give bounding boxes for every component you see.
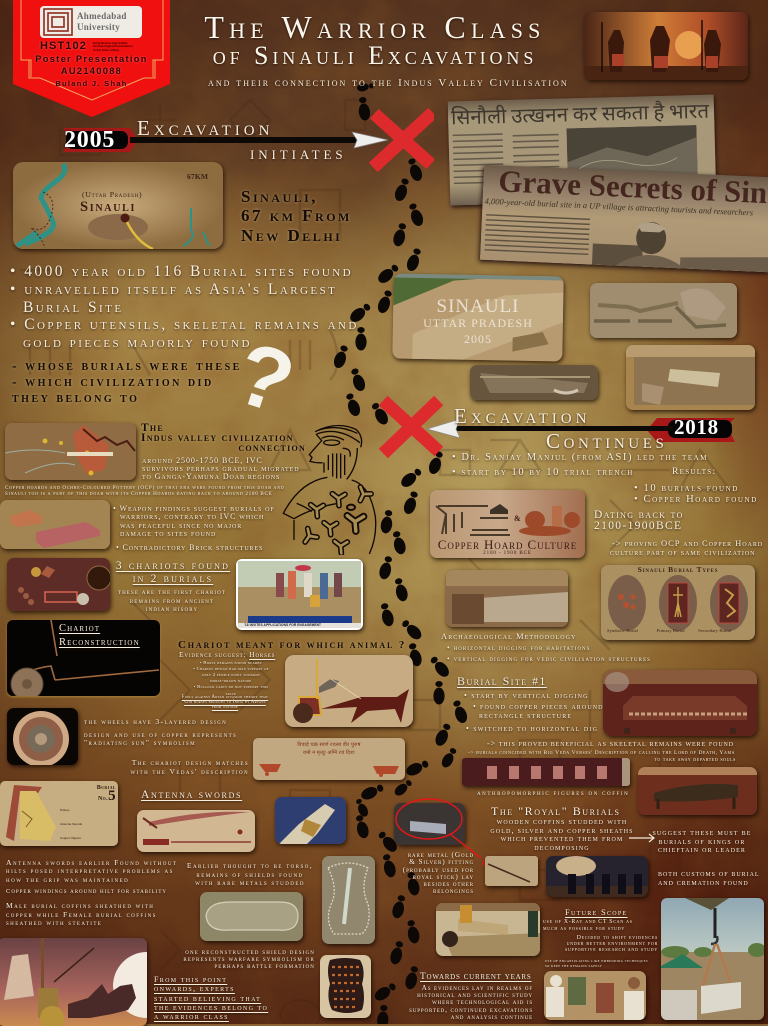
evidence list: • Horse remains found nearby xyxy=(200,660,262,665)
aryan theory note: from outside xyxy=(212,705,238,710)
questions: they belong to xyxy=(12,391,139,406)
methodology text: • horizontal digging for habitations xyxy=(447,642,591,652)
photo: shield remains xyxy=(200,892,303,941)
arrow: 2018 excavation continues xyxy=(426,418,735,442)
panel: burial no. 5 plan xyxy=(0,781,118,846)
photo: wooden bed coffin xyxy=(638,767,757,815)
verse text xyxy=(253,741,405,756)
shield design text: one reconstructed shield design xyxy=(185,949,315,956)
course title small print: Early Bronze Age Indian xyxy=(93,41,127,45)
proving text: -> proving OCP and Copper Hoard xyxy=(612,538,763,548)
photo: chariot illustration xyxy=(285,655,413,727)
photo: excavation blocks xyxy=(626,345,755,410)
proving text: culture part of same civilization xyxy=(610,546,755,556)
excavation: Excavation xyxy=(137,116,273,140)
panel: Sinauli burial types xyxy=(601,565,755,640)
photo caption: 2005 xyxy=(464,332,492,346)
kings conclusion: chieftain or leader xyxy=(658,845,746,854)
photo: anthropomorphic figures xyxy=(462,758,630,786)
state label: (Uttar Pradesh) xyxy=(82,190,142,199)
burial type labels: Symbolic Burial Primary Burial Secondary Burial xyxy=(607,628,731,633)
photo: scroll artifact xyxy=(275,797,346,844)
methodology text xyxy=(440,631,651,663)
distance label: 67KM xyxy=(187,172,208,181)
news ticker: '18 INVITES APPLICATIONS FOR ENGAGEMENT xyxy=(244,623,321,627)
poster presentation: Poster Presentation xyxy=(35,54,148,64)
warrior class conclusion: From this point xyxy=(154,975,227,984)
vedas description text: with the Vedas' description xyxy=(130,767,249,776)
copper hoards note xyxy=(4,485,284,497)
warrior class conclusion: a warrior class xyxy=(154,1012,229,1021)
subtitle: and their connection to the Indus Valley Civilisation xyxy=(208,77,569,89)
aryan theory note: said horses brought to India by Aryans xyxy=(184,700,266,705)
fitting text: & Silver) fitting xyxy=(409,857,474,866)
warrior class conclusion xyxy=(154,975,268,1021)
royal burials text: gold, silver and copper sheaths xyxy=(490,826,634,834)
chariots found text: indian hisory xyxy=(146,604,198,613)
kings conclusion xyxy=(652,828,752,854)
english headline: Grave Secrets of Sin xyxy=(498,165,768,210)
royal burials text: which prevented them from xyxy=(501,834,623,843)
questions: - which civilization did xyxy=(12,375,214,390)
chariots found heading xyxy=(113,560,233,585)
university logo: Ahmedabad xyxy=(77,11,127,21)
reconstruction title: Reconstruction xyxy=(59,637,140,648)
copper hoard culture label: 2100 - 1900 BCE xyxy=(483,551,532,556)
fitting text: royal stick) lay xyxy=(413,872,474,881)
fitting text: (probably used for xyxy=(403,865,474,874)
coffins text: sheathed with steatite xyxy=(6,918,102,927)
brick text: • Contradictory Brick structures xyxy=(116,543,263,552)
step two: • found copper pieces around xyxy=(473,702,604,711)
royal burials text xyxy=(490,817,634,852)
wheel design text: the wheels have 3-layered design xyxy=(84,717,227,726)
fitting text xyxy=(402,850,474,895)
heading: IVC connection xyxy=(141,422,306,454)
year 2005: 2005 xyxy=(64,127,115,153)
IVC migration text: to Ganga-Yamuna Doab regions xyxy=(142,472,280,481)
torso text xyxy=(180,862,320,888)
plan notes: Antenna Swords xyxy=(60,822,82,826)
course code: HST102 xyxy=(40,40,87,52)
course title small print xyxy=(93,41,133,52)
photo: researchers working xyxy=(544,971,646,1020)
shifting text xyxy=(565,935,658,953)
location text: 67 km From xyxy=(241,206,352,225)
shifting text: supportive research and study xyxy=(565,947,658,953)
poster presentation: AU2140088 xyxy=(61,66,122,76)
shifting text: Decided to shift evidences xyxy=(577,935,658,941)
panel: IVC map xyxy=(5,423,136,480)
towards current years text xyxy=(409,983,533,1021)
royal burials heading: The "Royal" Burials xyxy=(491,804,620,818)
towards current years text: As evidences lay in realms of xyxy=(422,983,533,992)
torso text: with rare metals studded xyxy=(195,878,305,887)
IVC migration text xyxy=(142,456,300,481)
chariots found heading: 3 chariots found xyxy=(116,560,230,572)
questions xyxy=(12,359,242,406)
poster presentation xyxy=(34,54,148,88)
antenna swords text: hilts posed interpretative problems as xyxy=(6,866,174,875)
heading excavation continues xyxy=(454,404,667,453)
weapon findings text: warriors, contrary to IVC which xyxy=(120,512,264,521)
key findings bullets: gold pieces majorly found xyxy=(23,334,252,351)
photo: warriors at sunset xyxy=(584,12,748,80)
red X marker 2018 xyxy=(378,396,444,458)
initiates: initiates xyxy=(250,144,346,164)
team details xyxy=(452,452,708,478)
burial site heading: Burial Site #1 xyxy=(457,674,547,688)
warrior class conclusion: the evidences belong to xyxy=(154,1003,268,1012)
proving text xyxy=(609,538,763,557)
chariots found heading: in 2 burials xyxy=(133,572,213,584)
plan notes: Copper Objects xyxy=(60,836,81,840)
arrow: 2005 excavation initiates xyxy=(63,128,388,152)
rig veda note xyxy=(468,750,736,762)
burial number: No.5 xyxy=(98,788,116,804)
reconstruction title xyxy=(59,622,140,650)
coffins text: copper while Female burial coffins xyxy=(6,910,157,918)
shifting text: under better environment for xyxy=(567,941,658,947)
university logo xyxy=(40,6,142,38)
IVC migration text: around 2500-1750 BCE, IVC xyxy=(142,456,263,465)
kings conclusion: burials of kings or xyxy=(659,836,745,846)
copper windings text: Copper windings around hilt for stability xyxy=(6,888,167,895)
continues: Continues xyxy=(546,429,667,453)
weapon findings text: damage to sites found xyxy=(120,529,216,538)
copper hoards note: Copper hoards and Ochre-Coloured Pottery (OCP) of that era were found from this doab and xyxy=(5,485,284,491)
callout: red circle pointer xyxy=(395,798,485,866)
plan notes: Pottery xyxy=(60,808,70,812)
newspaper subhead: 4,000-year-old burial site in a UP village is attracting tourists and researchers xyxy=(484,196,753,217)
icon: question mark: ? xyxy=(224,322,306,433)
photo: royal stick xyxy=(485,856,538,886)
antenna swords text xyxy=(6,859,178,884)
evidence title: Evidence suggest: Horses xyxy=(179,650,275,659)
royal burials text: wooden coffins studded with xyxy=(497,817,627,826)
banner shape xyxy=(13,0,170,117)
photo: crane lifting coffin xyxy=(661,898,764,1020)
title xyxy=(204,9,546,70)
evidence list: • Bullock carts do not support this xyxy=(194,684,268,689)
dating text: Dating back to xyxy=(594,509,684,521)
photo: torso shaped remains xyxy=(322,856,375,944)
shield design text xyxy=(175,949,315,970)
copper hoards note: Sinauli too is a part of this doab with its Copper Hoards dating back to around 2100 BCE xyxy=(5,491,272,497)
animal question heading: Chariot meant for which animal ? xyxy=(178,639,406,651)
chariots found text: these are the first chariot xyxy=(118,587,226,596)
questions: - whose burials were these xyxy=(12,359,242,374)
aryan theory note xyxy=(173,695,277,711)
photo: archaeological methodology xyxy=(446,570,568,627)
newspaper clipping: Grave Secrets of Sinauli xyxy=(480,165,768,272)
weapon findings text: • Weapon findings suggest burials of xyxy=(113,504,275,513)
red X marker 2005 xyxy=(368,108,434,172)
sinauli label: Sinauli xyxy=(80,199,136,215)
royal burials text: decomposing xyxy=(534,842,590,852)
customs text xyxy=(658,869,759,887)
encapsulating text: use of encapsulating like embedding techniques xyxy=(545,959,648,963)
towards current years heading: Towards current years xyxy=(420,972,531,982)
fitting text: rare metal (Gold xyxy=(408,850,474,859)
step three: • switched to horizontal dig xyxy=(466,724,598,733)
chariots found text xyxy=(112,588,232,614)
coffins text: Male burial coffins sheathed with xyxy=(6,901,154,910)
hindi headline: सिनौली उत्खनन कर सकता है भारत xyxy=(451,95,709,130)
step two xyxy=(472,702,604,720)
poster presentation: Buland J. Shah xyxy=(55,79,128,88)
coffins text xyxy=(6,902,157,928)
rig veda note: to take away departed souls xyxy=(654,756,736,762)
evidence list: • Chariot design had max support of xyxy=(193,666,269,671)
copper symbolism text: "radiating sun" symbolism xyxy=(84,738,196,747)
evidence list: only 2 people point towards xyxy=(202,672,260,677)
photo: chariot burial xyxy=(7,558,110,611)
location text: New Delhi xyxy=(241,226,342,245)
plan notes xyxy=(60,803,82,845)
verse text: विवाहे चक्रं स्वर्ण रथस्य वीर पुरुष xyxy=(297,741,361,748)
step one: • start by vertical digging xyxy=(464,691,589,700)
evidence list xyxy=(181,660,281,696)
dating text: 2100-1900BCE xyxy=(594,520,682,532)
vedas description text: The chariot design matches xyxy=(132,758,249,767)
antenna swords text: how the grip was maintained xyxy=(6,875,129,884)
illustration: warrior on chariot at sunset xyxy=(0,938,147,1026)
year 2018: 2018 xyxy=(674,415,719,439)
torso text: remains of shields found xyxy=(196,870,304,878)
course title small print: in the Indus Valley xyxy=(93,48,119,52)
map: Sinauli location xyxy=(13,162,223,249)
reconstruction title: Chariot xyxy=(59,623,100,634)
evidence list: horse-drawn nature xyxy=(210,678,252,683)
evidence list: space xyxy=(226,691,236,696)
burial site steps xyxy=(464,691,604,733)
photo: cremation scene xyxy=(546,856,648,897)
map labels xyxy=(80,172,208,215)
burial types heading: Sinauli Burial Types xyxy=(638,565,718,574)
copper symbolism text: design and use of copper represents xyxy=(84,730,237,739)
photo: news footage xyxy=(236,559,363,630)
key findings bullets: Burial Site xyxy=(23,299,124,316)
antenna swords heading: Antenna swords xyxy=(141,789,242,801)
photo: workers with coffin xyxy=(436,903,540,956)
step two: rectangle structure xyxy=(479,710,572,720)
university logo: University xyxy=(77,22,120,32)
heading: IVC connection: Indus valley civilization xyxy=(141,432,294,444)
customs text: both customs of burial xyxy=(658,869,759,878)
customs text: and cremation found xyxy=(658,878,749,887)
fitting text: besides other xyxy=(424,879,474,888)
copper symbolism text xyxy=(84,731,237,748)
weapon findings text xyxy=(113,505,275,539)
torso text: Earlier thought to be torso, xyxy=(187,861,313,870)
team details: • start by 10 by 10 trial trench xyxy=(452,467,634,478)
rig veda note: -> burials coincided with Rig Veda Verses' Description of calling the Lord of Death, Yama xyxy=(468,750,735,756)
key findings bullets: • 4000 year old 116 Burial sites found xyxy=(10,263,353,280)
towards current years text: and analysis continue xyxy=(451,1012,533,1021)
panel: sanskrit verse scroll xyxy=(253,738,405,780)
copper hoard culture label: Copper Hoard Culture xyxy=(438,537,577,552)
aryan theory note: Fuels against Aryan invasion theory that xyxy=(182,695,268,700)
wheel image xyxy=(7,708,78,765)
dating text xyxy=(594,509,684,532)
xray text: use of X-Ray and CT Scan as xyxy=(543,919,633,925)
title: The Warrior Class xyxy=(204,9,546,45)
illustration: priest king figure xyxy=(282,424,376,555)
panel: sword illustration xyxy=(137,810,255,852)
antenna swords text: Antenna swords earlier Found without xyxy=(6,858,178,867)
shield design text: perhaps battle formation xyxy=(214,963,315,970)
encapsulating text xyxy=(545,959,648,968)
photo: coffin reconstruction xyxy=(603,670,757,736)
IVC migration text: survivors perhaps gradual migrated xyxy=(142,464,299,473)
key findings bullets: • Copper utensils, skeletal remains and xyxy=(10,316,359,333)
team details: • Dr. Sanjay Manjul (from ASI) led the team xyxy=(452,452,708,463)
heading: IVC connection: connection xyxy=(238,442,306,454)
xray text xyxy=(543,919,633,932)
photo: Sinauli 2005 site xyxy=(392,274,564,361)
panel: chariot reconstruction xyxy=(7,620,160,696)
burial number xyxy=(70,785,116,803)
course title small print: Archaeological Excavations xyxy=(93,44,133,48)
xray text: much as possible for study xyxy=(543,926,625,932)
future scope text xyxy=(543,919,658,968)
heading excavation initiates xyxy=(137,116,346,164)
kings conclusion: suggest these must be xyxy=(652,828,752,837)
chariots found text: remains from ancient xyxy=(130,596,214,604)
warrior class conclusion: started believing that xyxy=(154,994,261,1003)
results list: • Copper Hoard found xyxy=(634,494,758,505)
arrow: suggests xyxy=(629,834,655,842)
warrior class conclusion: onwards, experts xyxy=(154,984,235,993)
photo caption: UTTAR PRADESH xyxy=(423,316,533,330)
photo: silver fitting closeup xyxy=(394,803,465,845)
photo: trench xyxy=(470,365,598,400)
key findings bullets xyxy=(10,263,359,351)
title: of Sinauli Excavations xyxy=(213,41,537,70)
burial number: Burial xyxy=(97,785,116,791)
newspaper clipping: Hindi xyxy=(448,95,716,205)
results list xyxy=(634,483,758,505)
proved beneficial text: -> this proved beneficial as skeletal remains were found xyxy=(487,739,734,748)
horses evidence xyxy=(179,650,284,712)
location text: Sinauli, xyxy=(241,187,318,206)
banner: university and course details xyxy=(13,0,170,117)
encapsulating text: so keep the remains safely xyxy=(545,964,602,968)
shield design text: represents warfare symbolism or xyxy=(183,956,315,963)
panel: brick comparison xyxy=(0,500,110,549)
heading: IVC connection: The xyxy=(141,422,164,434)
verse text: यमो न मृत्युः अग्निं रथं दिशः xyxy=(303,748,355,756)
excavation: Excavation xyxy=(454,404,590,428)
towards current years text: historical and scientific study xyxy=(417,990,533,999)
towards current years text: supported, continued excavations xyxy=(409,1005,533,1014)
coffin caption: anthropomorphic figures on coffin xyxy=(477,789,629,797)
photo: skeletal remains xyxy=(590,283,737,338)
photo caption xyxy=(423,296,533,346)
results heading: Results: xyxy=(672,467,716,477)
vedas description text xyxy=(100,758,249,776)
ampersand: & xyxy=(514,514,521,523)
photo caption: SINAULI xyxy=(436,296,520,317)
methodology text: • vertical digging for vedic civilisation structures xyxy=(447,654,651,663)
weapon findings text: was peaceful since no major xyxy=(120,521,242,530)
panel: copper hoard culture xyxy=(430,490,585,558)
fitting text: belongings xyxy=(433,886,474,895)
results list: • 10 burials found xyxy=(634,483,739,494)
illustration: reconstructed shield xyxy=(320,955,371,1018)
future scope heading: Future Scope xyxy=(565,907,628,917)
methodology text: Archaeological Methodology xyxy=(441,631,576,641)
towards current years text: where technological aid is xyxy=(432,997,533,1006)
location text xyxy=(240,187,352,245)
key findings bullets: • unravelled itself as Asia's Largest xyxy=(10,281,337,298)
